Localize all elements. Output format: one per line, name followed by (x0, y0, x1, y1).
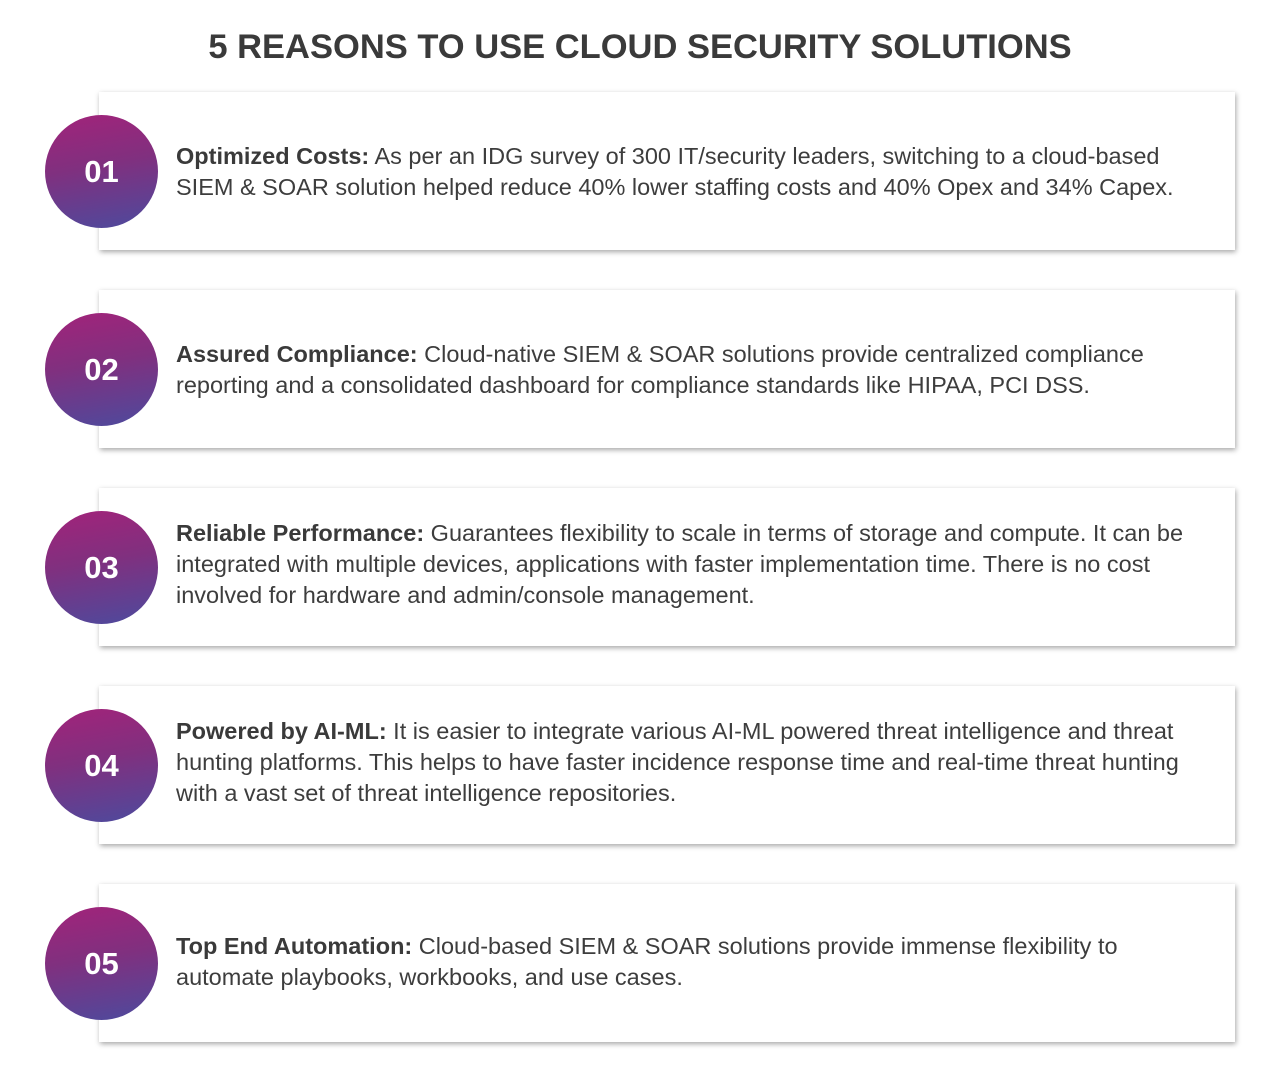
card 5 (99, 884, 1235, 1042)
circle 04 (45, 709, 158, 822)
text 03 (176, 520, 1183, 608)
text 02 (176, 341, 1144, 398)
text 01 (176, 143, 1174, 200)
text 03: integrated with multiple devices, applications with faster implementation time. There is no cost (176, 551, 1150, 577)
title: 5 REASONS TO USE CLOUD SECURITY SOLUTIONS (208, 28, 1072, 66)
circle 04: 04 (84, 748, 119, 782)
text 05 (176, 933, 1118, 990)
text 03: Reliable Performance: Guarantees flexibility to scale in terms of storage and compute. It can be (176, 520, 1183, 546)
text 05: automate playbooks, workbooks, and use cases. (176, 964, 683, 990)
text 02: reporting and a consolidated dashboard for compliance standards like HIPAA, PCI DSS. (176, 372, 1090, 398)
circle 05 (45, 907, 158, 1020)
circle 01 (45, 115, 158, 228)
text 01: Optimized Costs: As per an IDG survey of 300 IT/security leaders, switching to a cloud-based (176, 143, 1159, 169)
circle 05: 05 (84, 946, 119, 980)
card 1 (99, 92, 1235, 250)
circle 02 (45, 313, 158, 426)
text 04: Powered by AI-ML: It is easier to integrate various AI-ML powered threat intelligence and threat (176, 718, 1173, 744)
circle 02: 02 (84, 352, 119, 386)
card 4 (99, 686, 1235, 844)
card 3 (99, 488, 1235, 646)
circle 01: 01 (84, 154, 119, 188)
text 03: involved for hardware and admin/console management. (176, 582, 755, 608)
card 2 (99, 290, 1235, 448)
text 02: Assured Compliance: Cloud-native SIEM & SOAR solutions provide centralized compliance (176, 341, 1144, 367)
text 04 (176, 718, 1179, 806)
text 01: SIEM & SOAR solution helped reduce 40% lower staffing costs and 40% Opex and 34% Capex. (176, 174, 1174, 200)
circle 03 (45, 511, 158, 624)
text 05: Top End Automation: Cloud-based SIEM & SOAR solutions provide immense flexibility to (176, 933, 1118, 959)
circle 03: 03 (84, 550, 119, 584)
text 04: with a vast set of threat intelligence repositories. (176, 780, 676, 806)
text 04: hunting platforms. This helps to have faster incidence response time and real-time threat hunting (176, 749, 1179, 775)
